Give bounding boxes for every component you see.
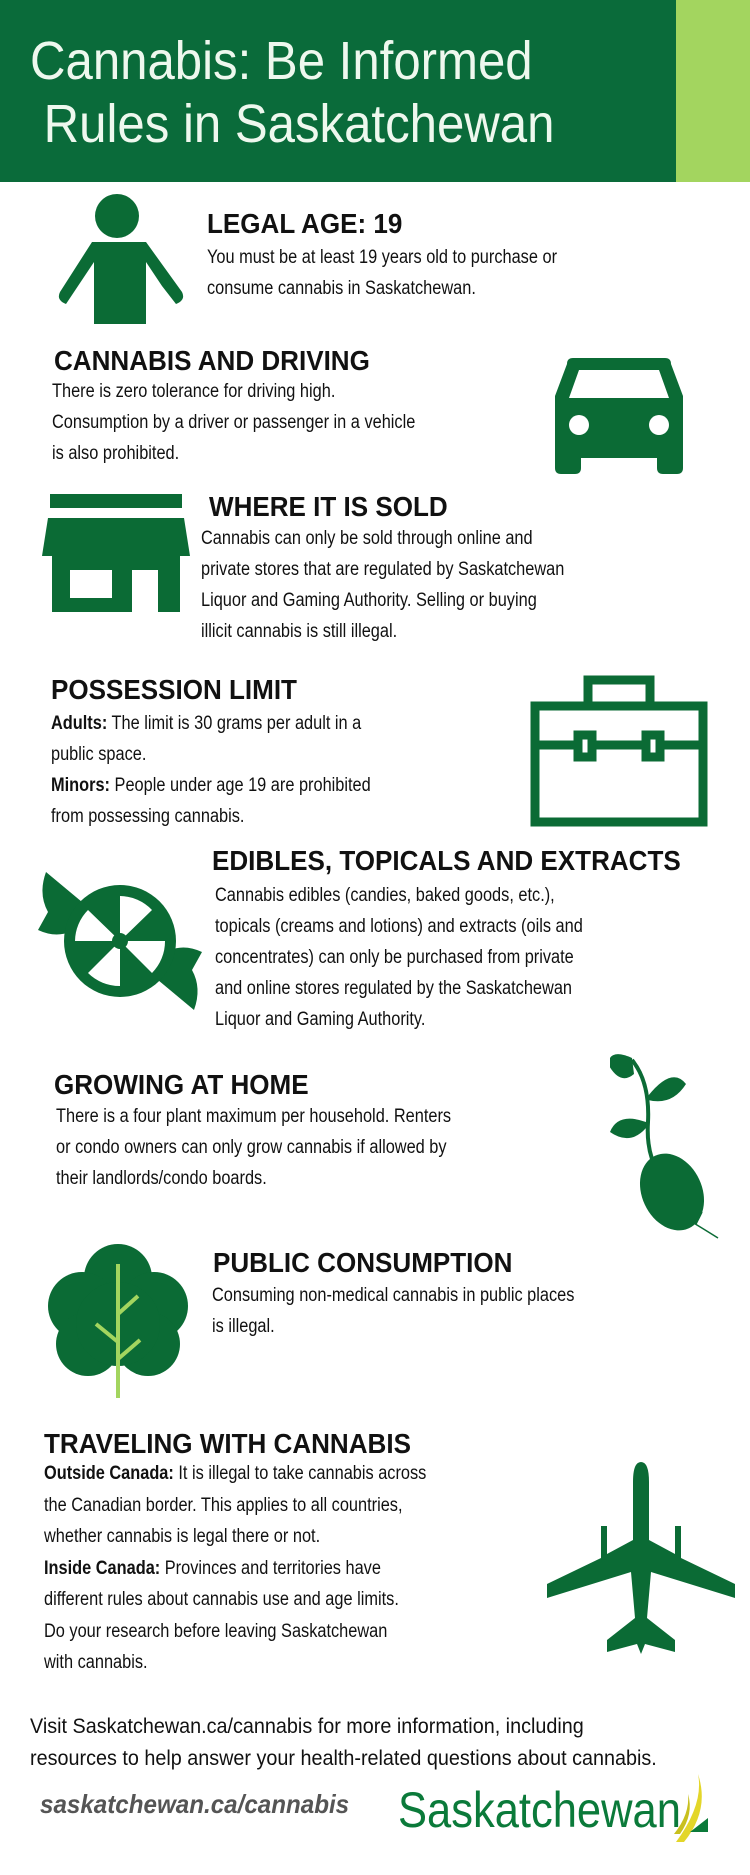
- text: Adults: The limit is 30 grams per adult in a: [51, 713, 361, 734]
- text: and online stores regulated by the Saskatchewan: [215, 978, 572, 999]
- text: with cannabis.: [44, 1652, 148, 1673]
- text: topicals (creams and lotions) and extracts (oils and: [215, 916, 583, 937]
- text: [201, 528, 564, 642]
- text: consume cannabis in Saskatchewan.: [207, 278, 476, 299]
- section: edibles: [212, 845, 681, 1030]
- text: Liquor and Gaming Authority. Selling or buying: [201, 590, 537, 611]
- heading: CANNABIS AND DRIVING: [54, 345, 370, 376]
- icon: person: [58, 194, 184, 324]
- title: Cannabis: Be Informed: [30, 31, 533, 91]
- heading: PUBLIC CONSUMPTION: [213, 1247, 512, 1278]
- heading: EDIBLES, TOPICALS AND EXTRACTS: [212, 845, 681, 876]
- text: Consumption by a driver or passenger in a vehicle: [52, 412, 415, 433]
- section: legal age: [207, 208, 557, 299]
- text: Liquor and Gaming Authority.: [215, 1009, 425, 1030]
- text: the Canadian border. This applies to all countries,: [44, 1494, 402, 1516]
- accent strip: [676, 0, 750, 182]
- icon: store: [42, 494, 190, 612]
- text: Minors: People under age 19 are prohibited: [51, 775, 371, 796]
- icon: seedling: [610, 1054, 718, 1239]
- text: [207, 247, 557, 299]
- section: traveling: [44, 1428, 426, 1673]
- heading: GROWING AT HOME: [54, 1069, 309, 1100]
- text: from possessing cannabis.: [51, 806, 244, 827]
- logo mark: [674, 1774, 708, 1842]
- text: public space.: [51, 744, 146, 765]
- text: Inside Canada: Provinces and territories have: [44, 1558, 381, 1578]
- text: You must be at least 19 years old to purchase or: [207, 247, 557, 268]
- text: is also prohibited.: [52, 443, 179, 464]
- icon: tree: [48, 1244, 188, 1398]
- logo wordmark: Saskatchewan: [398, 1782, 681, 1838]
- text: is illegal.: [212, 1316, 275, 1337]
- title: Rules in Saskatchewan: [44, 94, 554, 154]
- text: concentrates) can only be purchased from private: [215, 947, 574, 968]
- text: illicit cannabis is still illegal.: [201, 621, 397, 642]
- text: different rules about cannabis use and age limits.: [44, 1589, 399, 1610]
- heading: POSSESSION LIMIT: [51, 674, 297, 705]
- text: private stores that are regulated by Saskatchewan: [201, 559, 564, 580]
- text: [44, 1463, 426, 1673]
- text: [215, 885, 583, 1030]
- text: Cannabis edibles (candies, baked goods, etc.),: [215, 885, 555, 906]
- text: [212, 1285, 574, 1337]
- text: their landlords/condo boards.: [56, 1168, 267, 1189]
- text: Consuming non-medical cannabis in public places: [212, 1285, 574, 1306]
- section: where it is sold: [201, 491, 564, 642]
- text: There is zero tolerance for driving high.: [52, 381, 335, 402]
- heading: TRAVELING WITH CANNABIS: [44, 1428, 411, 1459]
- text: whether cannabis is legal there or not.: [44, 1526, 320, 1547]
- icon: airplane: [547, 1462, 735, 1654]
- section: growing at home: [54, 1069, 451, 1189]
- text: There is a four plant maximum per household. Renters: [56, 1106, 451, 1127]
- footer text: [30, 1714, 657, 1770]
- text: or condo owners can only grow cannabis if allowed by: [56, 1137, 447, 1158]
- icon: candy: [38, 872, 202, 1010]
- footer text: Visit Saskatchewan.ca/cannabis for more information, including: [30, 1714, 584, 1738]
- heading: WHERE IT IS SOLD: [209, 491, 448, 522]
- logo: Saskatchewan: [398, 1774, 708, 1842]
- footer text: resources to help answer your health-related questions about cannabis.: [30, 1746, 657, 1770]
- text: [51, 713, 371, 827]
- text: Do your research before leaving Saskatchewan: [44, 1620, 387, 1642]
- section: possession limit: [51, 674, 371, 827]
- text: [56, 1106, 451, 1189]
- header banner: [0, 0, 750, 182]
- title: [30, 31, 554, 154]
- heading: LEGAL AGE: 19: [207, 208, 402, 239]
- icon: briefcase: [530, 676, 708, 826]
- section: driving: [52, 345, 415, 464]
- footer url: saskatchewan.ca/cannabis: [40, 1789, 349, 1819]
- icon: car: [555, 358, 683, 474]
- text: [52, 381, 415, 464]
- text: Cannabis can only be sold through online and: [201, 528, 533, 549]
- section: public consumption: [212, 1247, 574, 1337]
- text: Outside Canada: It is illegal to take cannabis across: [44, 1463, 426, 1484]
